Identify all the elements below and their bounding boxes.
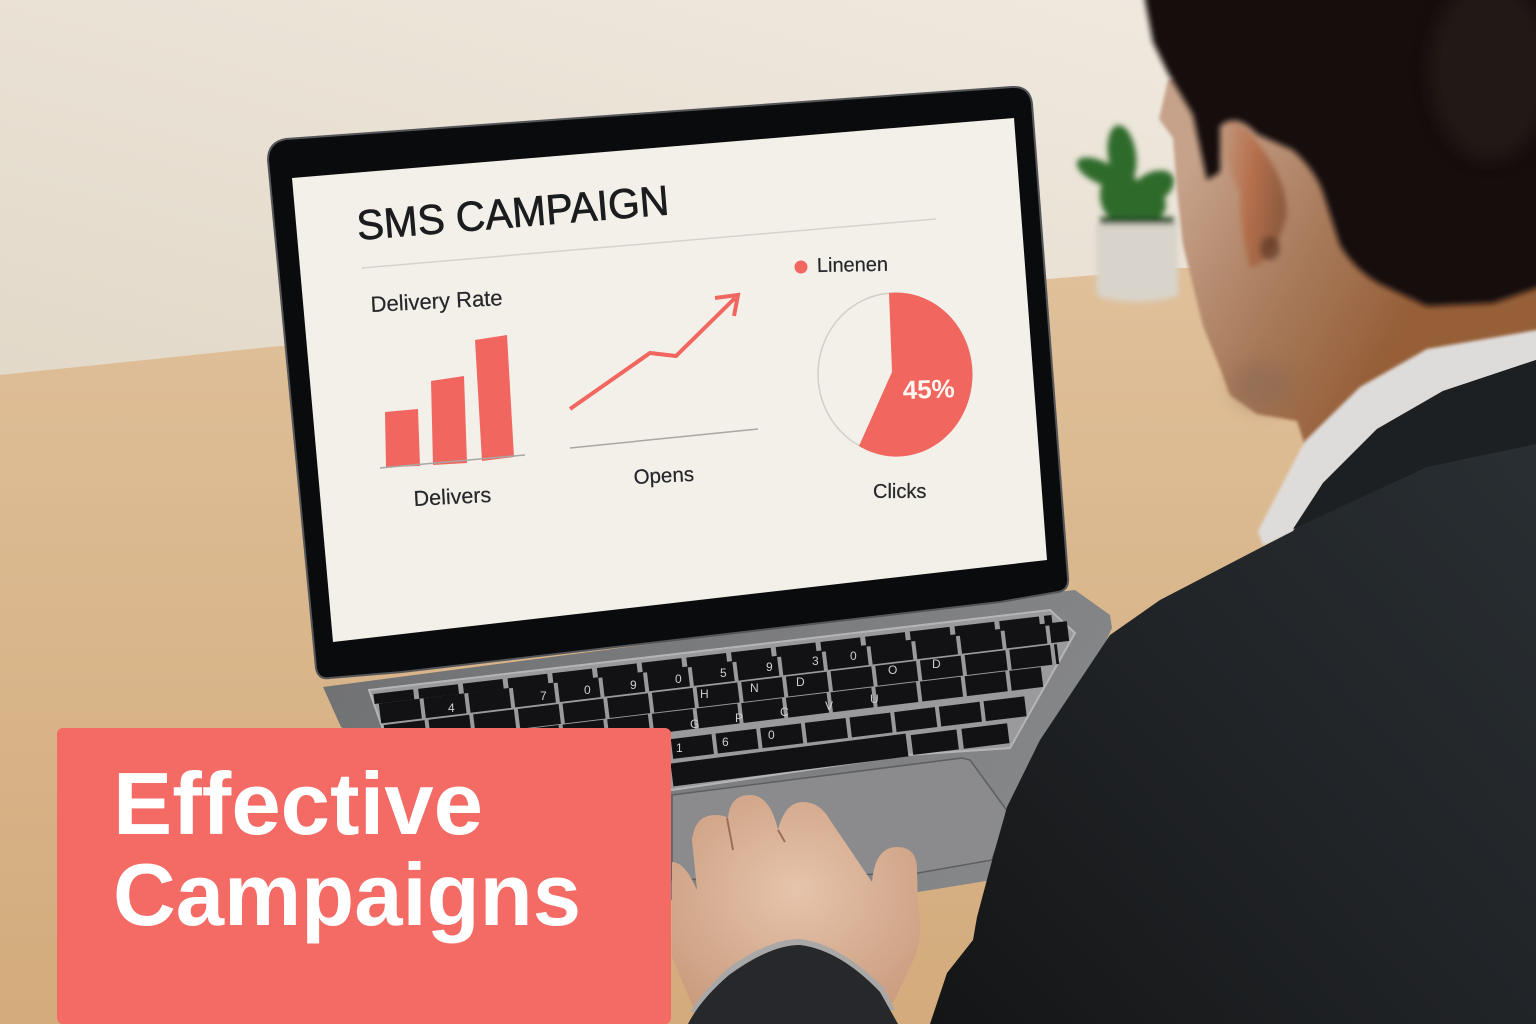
background: wall (0, 0, 1536, 400)
key legends (448, 649, 941, 755)
jaw stubble shade (1232, 361, 1292, 409)
key legends: D (796, 675, 805, 689)
key legends: 9 (766, 660, 773, 674)
key legends: C (780, 705, 789, 719)
key legends: 0 (768, 728, 775, 742)
key legends: G (690, 717, 699, 731)
pie chart (818, 293, 972, 457)
label: Delivers: Delivers (413, 483, 492, 511)
ear inner shadow (1260, 236, 1280, 260)
legend: Linenen: Linenen (817, 254, 888, 277)
hand on trackpad (672, 795, 920, 1024)
trackpad (672, 758, 1008, 880)
key legends: 0 (584, 683, 591, 697)
pot soil (1100, 217, 1174, 224)
key legends: 0 (850, 649, 857, 663)
ear (1220, 122, 1287, 268)
key legends: 4 (448, 701, 455, 715)
key legends: 5 (720, 666, 727, 680)
label: Delivery Rate: Delivery Rate (370, 285, 503, 317)
title panel (57, 728, 671, 1024)
screen divider (362, 219, 936, 268)
key legends: N (750, 681, 759, 695)
screen title: SMS CAMPAIGN: SMS CAMPAIGN (355, 176, 671, 249)
key legends: 0 (675, 672, 682, 686)
bar chart (380, 335, 525, 468)
key legends: P (735, 711, 743, 725)
hair (1145, 0, 1536, 306)
key legends: 9 (630, 678, 637, 692)
head and neck skin (1159, 60, 1536, 445)
line chart arrow (570, 295, 758, 448)
label: Clicks: Clicks (873, 481, 926, 503)
pie value: 45% (902, 373, 955, 405)
keyboard well (369, 610, 1075, 790)
key legends: 6 (722, 735, 729, 749)
laptop screen (292, 118, 1047, 642)
shirt collar (1258, 326, 1536, 546)
keyboard keys (374, 620, 1068, 775)
icon: potted plant (1073, 123, 1180, 302)
key legends: 3 (812, 654, 819, 668)
hair highlight (1430, 0, 1536, 160)
key legends: H (700, 687, 709, 701)
key legends: U (870, 692, 879, 706)
finger creases (727, 818, 785, 850)
laptop lid bezel (268, 87, 1068, 678)
laptop (268, 87, 1112, 900)
key legends: V (825, 699, 833, 713)
jacket (930, 360, 1536, 1024)
laptop base (323, 590, 1112, 900)
key legends: D (932, 657, 941, 671)
key legends: 1 (676, 741, 683, 755)
person (930, 0, 1536, 1024)
key legends: O (888, 663, 897, 677)
jacket collar band (1293, 360, 1536, 529)
title text line 2: Campaigns (113, 845, 581, 944)
background: wooden desk (0, 268, 1536, 1024)
shirt cuff (690, 939, 895, 1012)
title text: Effective (113, 754, 483, 853)
sleeve (688, 945, 898, 1024)
label: Opens: Opens (633, 463, 695, 489)
plant leaves (1073, 123, 1180, 222)
key legends: 7 (540, 689, 547, 703)
plant pot (1095, 220, 1178, 302)
